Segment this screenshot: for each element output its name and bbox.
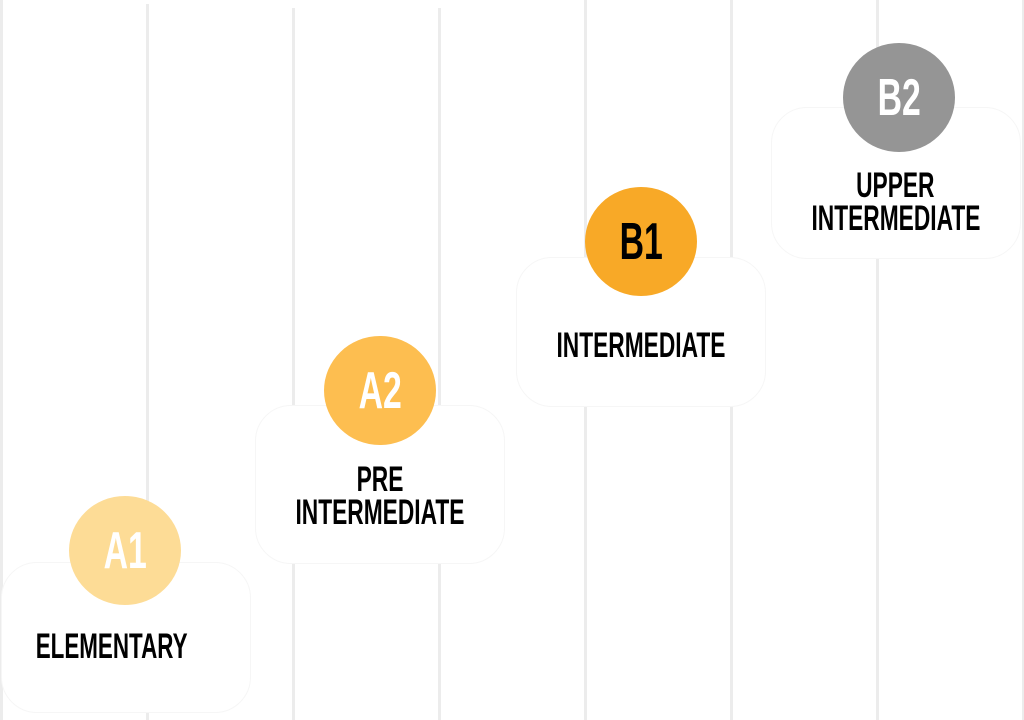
badge: A1 <box>69 496 181 605</box>
label: Elementary: ELEMENTARY <box>36 627 187 666</box>
badge: A2: A2 <box>358 362 402 420</box>
panel: A1 elementary <box>1 496 251 713</box>
label: Pre Intermediate: INTERMEDIATE <box>296 493 464 532</box>
label: Intermediate: INTERMEDIATE <box>556 326 725 365</box>
label: Pre Intermediate <box>296 460 464 532</box>
badge: B1: B1 <box>619 213 663 271</box>
panel: B1 intermediate <box>516 187 766 407</box>
label: Upper Intermediate: UPPER <box>856 166 935 205</box>
badge: B1 <box>585 187 697 296</box>
card: B2 <box>771 107 1021 259</box>
panel: B2 upper intermediate <box>771 43 1021 259</box>
badge: A1: A1 <box>103 522 147 580</box>
label: Upper Intermediate <box>811 166 980 238</box>
label: Pre Intermediate: PRE <box>357 460 403 499</box>
badge: A2 <box>324 336 436 445</box>
card: A1 <box>1 562 251 713</box>
card: A2 <box>255 405 505 564</box>
card: B1 <box>516 257 766 407</box>
badge: B2 <box>843 43 955 152</box>
panel: A2 pre intermediate <box>255 336 505 564</box>
label: Upper Intermediate: INTERMEDIATE <box>811 199 980 238</box>
badge: B2: B2 <box>877 69 921 127</box>
